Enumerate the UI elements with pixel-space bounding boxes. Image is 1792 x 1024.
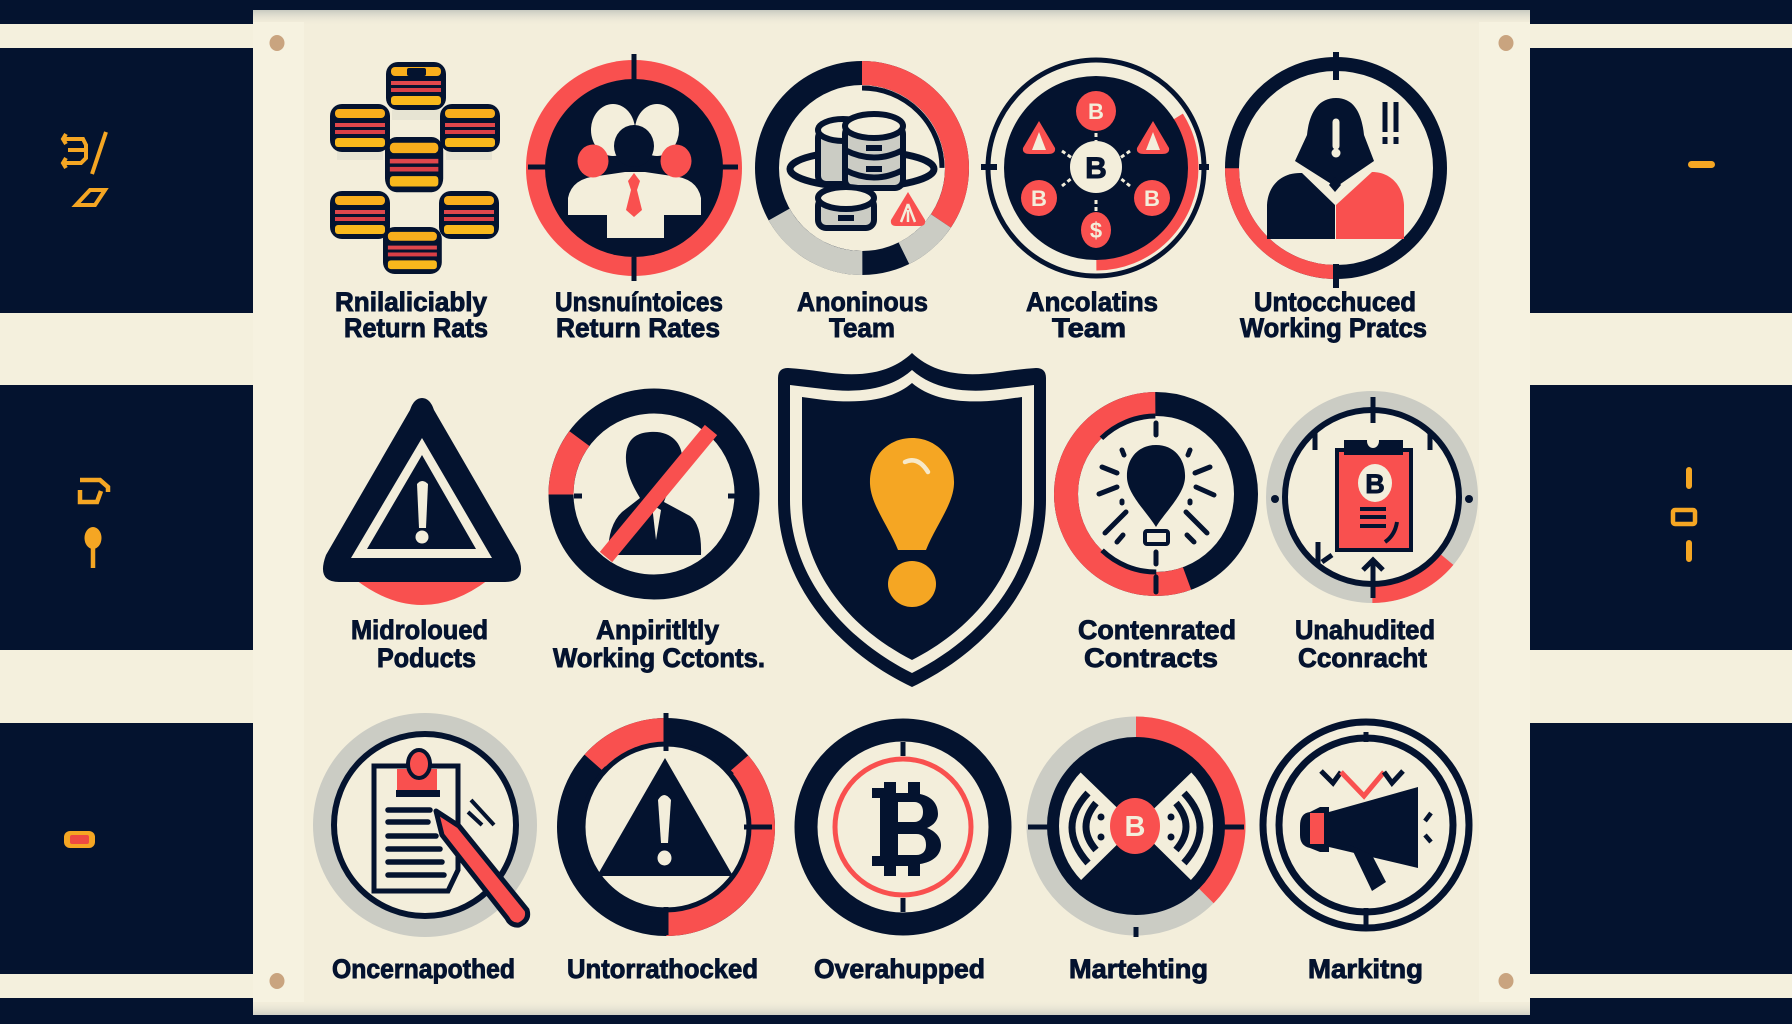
yellow mark: left panel 3 (64, 831, 95, 848)
right cream bands (1530, 24, 1792, 998)
label: Unsnuíntoices (555, 287, 723, 317)
icon: central shield (778, 353, 1046, 687)
label (553, 615, 765, 673)
icon: audit clipboard (1271, 397, 1473, 598)
label: Markitng (1308, 954, 1423, 984)
label: Oncernapothed (332, 954, 515, 984)
label (555, 287, 723, 343)
icon: warning gauge (569, 713, 772, 935)
yellow mark: right panel 1 (1688, 161, 1715, 168)
icon: bitcoin network: $ (1090, 218, 1102, 243)
label (351, 615, 488, 673)
icon: bitcoin coin (806, 730, 1000, 924)
icon: megaphone (1263, 722, 1469, 928)
label: Untorrathocked (567, 954, 758, 984)
icon: team target (526, 54, 742, 281)
label (335, 287, 488, 343)
icon: no person prohibition (561, 401, 747, 587)
icon: coin stacks (330, 62, 500, 274)
label: Return Rates (556, 313, 720, 343)
central poster panel (253, 10, 1530, 1015)
icon: light bulb (1066, 404, 1246, 592)
label (1026, 287, 1158, 343)
label: Return Rats (344, 313, 488, 343)
label: Poducts (377, 643, 476, 673)
label: Contracts (1084, 643, 1218, 673)
icon: bitcoin network: B (1085, 152, 1107, 185)
icon: bitcoin network: B (1088, 99, 1104, 124)
label: Rnilaliciably (335, 287, 487, 317)
label: Martehting (1069, 954, 1208, 984)
label: Unahudited (1295, 615, 1435, 645)
icon: anonymous founder (1232, 52, 1440, 288)
label: Working Cctonts. (553, 643, 765, 673)
yellow mark: left panel 2 (80, 480, 108, 568)
label: Working Pratcs (1240, 313, 1427, 343)
label: Contenrated (1078, 615, 1236, 645)
icon: hype broadcast (1028, 727, 1244, 937)
label: Anoninous (797, 287, 928, 317)
icon: bitcoin network: B (1031, 186, 1047, 211)
label (1078, 615, 1236, 673)
yellow mark: left panel 1 (63, 132, 106, 205)
icon: audit clipboard: B (1365, 469, 1385, 499)
label (1240, 287, 1427, 343)
label: Team (829, 313, 895, 343)
label: Cconracht (1298, 643, 1427, 673)
icon: hype broadcast: B (1125, 811, 1145, 843)
label (797, 287, 928, 343)
icon: document and pencil (323, 723, 528, 927)
label: Overahupped (814, 954, 985, 984)
icon: bitcoin network (981, 60, 1209, 276)
icon: warning triangle (323, 398, 521, 605)
pins (270, 35, 1514, 989)
label: Untocchuced (1254, 287, 1416, 317)
label: Anpiritltly (596, 615, 719, 645)
label: Midroloued (351, 615, 488, 645)
label: Team (1052, 313, 1126, 343)
icon: bitcoin network: B (1144, 186, 1160, 211)
yellow mark: right panel 2 (1673, 470, 1695, 559)
label: Ancolatins (1026, 287, 1158, 317)
label (1295, 615, 1435, 673)
left cream bands (0, 24, 253, 998)
icon: database with warning (767, 73, 957, 263)
